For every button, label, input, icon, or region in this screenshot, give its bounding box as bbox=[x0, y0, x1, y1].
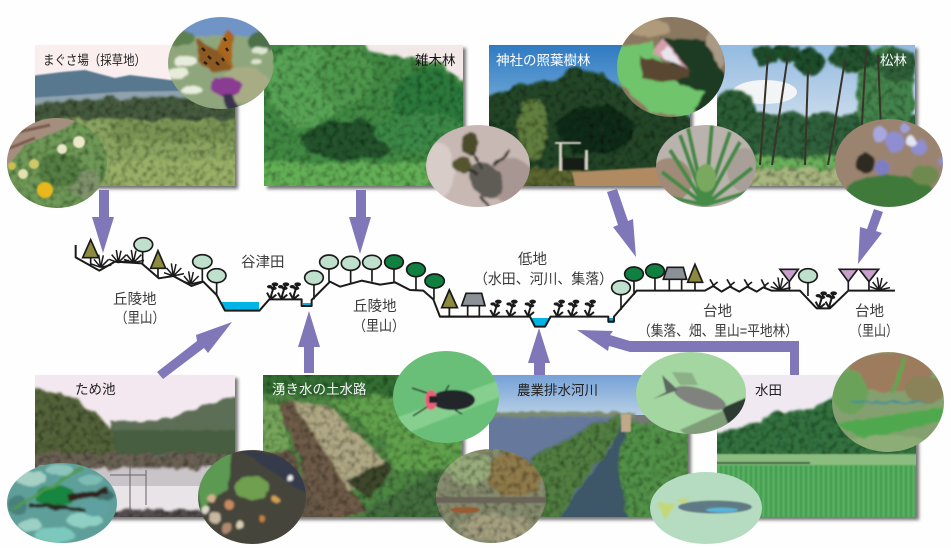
panel: pine forest photo bbox=[710, 40, 920, 191]
terrain line: east section bbox=[440, 264, 895, 327]
label: hill west: 丘陵地 bbox=[113, 291, 156, 308]
label: lowland sub: （水田、河川、集落） bbox=[474, 271, 613, 288]
label: hill west sub: （里山） bbox=[115, 310, 165, 327]
label: hill center sub: （里山） bbox=[353, 318, 405, 335]
label: yatsuda: 谷津田 bbox=[241, 254, 284, 271]
panel: magusaba meadow photo bbox=[35, 45, 240, 192]
icon: loach photo bbox=[434, 447, 548, 547]
icon: damselfly on leaf photo bbox=[830, 350, 946, 455]
icon: violet photo bbox=[833, 117, 945, 209]
arrow: river bbox=[528, 328, 550, 375]
panel: agricultural drainage river photo bbox=[485, 370, 695, 520]
icon: sedge plant photo bbox=[656, 125, 756, 207]
terrain labels bbox=[113, 251, 898, 340]
icon: medaka photo bbox=[648, 470, 764, 546]
icon: dandelion photo bbox=[7, 118, 107, 208]
arrow: pond to valley bbox=[157, 322, 232, 379]
icon: butterfly on thistle photo bbox=[168, 17, 274, 109]
arrow: paddy to lowland bbox=[577, 330, 799, 375]
panel: paddy field photo bbox=[710, 370, 920, 522]
icon: stag beetle photo bbox=[426, 125, 530, 207]
label: lowland: 低地 bbox=[518, 251, 547, 268]
label: tameike: ため池 bbox=[75, 382, 116, 397]
label: paddy: 水田 bbox=[755, 383, 782, 398]
arrow: pine forest to terrace bbox=[858, 209, 883, 264]
label: pine forest: 松林 bbox=[880, 53, 908, 68]
water: pond and channels bbox=[221, 302, 614, 327]
arrow: ditch bbox=[298, 311, 320, 373]
label: ditch: 湧き水の土水路 bbox=[272, 382, 367, 397]
arrow: shrine forest to terrace bbox=[607, 189, 636, 257]
arrow: woodland to hill bbox=[349, 190, 371, 254]
icon: firefly photo bbox=[393, 351, 499, 443]
terrain line: west section bbox=[76, 238, 480, 317]
panel: spring-fed earthen ditch photo bbox=[258, 370, 470, 525]
label: hill center: 丘陵地 bbox=[353, 298, 396, 315]
label: terrace: 台地 bbox=[703, 303, 732, 320]
label: magusaba: まぐさ場（採草地） bbox=[43, 53, 146, 68]
icon: butterfly on leaf photo bbox=[617, 17, 725, 117]
label: river: 農業排水河川 bbox=[517, 383, 598, 398]
label: terrace east: 台地 bbox=[855, 303, 884, 320]
label: shrine forest: 神社の照葉樹林 bbox=[496, 53, 591, 68]
icon: crucian fish photo bbox=[636, 352, 746, 434]
chart: terrain cross-section bbox=[76, 238, 895, 327]
panel: tameike pond photo bbox=[25, 370, 245, 521]
label: zoki: 雑木林 bbox=[415, 53, 456, 68]
panel: zoki mixed woodland photo bbox=[264, 45, 468, 192]
label: terrace east sub: （里山） bbox=[850, 323, 898, 340]
icon: frog photo bbox=[196, 448, 308, 546]
panel: shrine evergreen forest photo bbox=[489, 45, 696, 192]
arrow: meadow to hill bbox=[92, 190, 114, 253]
label: terrace sub: （集落、畑、里山=平地林） bbox=[638, 323, 798, 340]
icon: damselfly nymph on pebbles photo bbox=[7, 463, 117, 543]
